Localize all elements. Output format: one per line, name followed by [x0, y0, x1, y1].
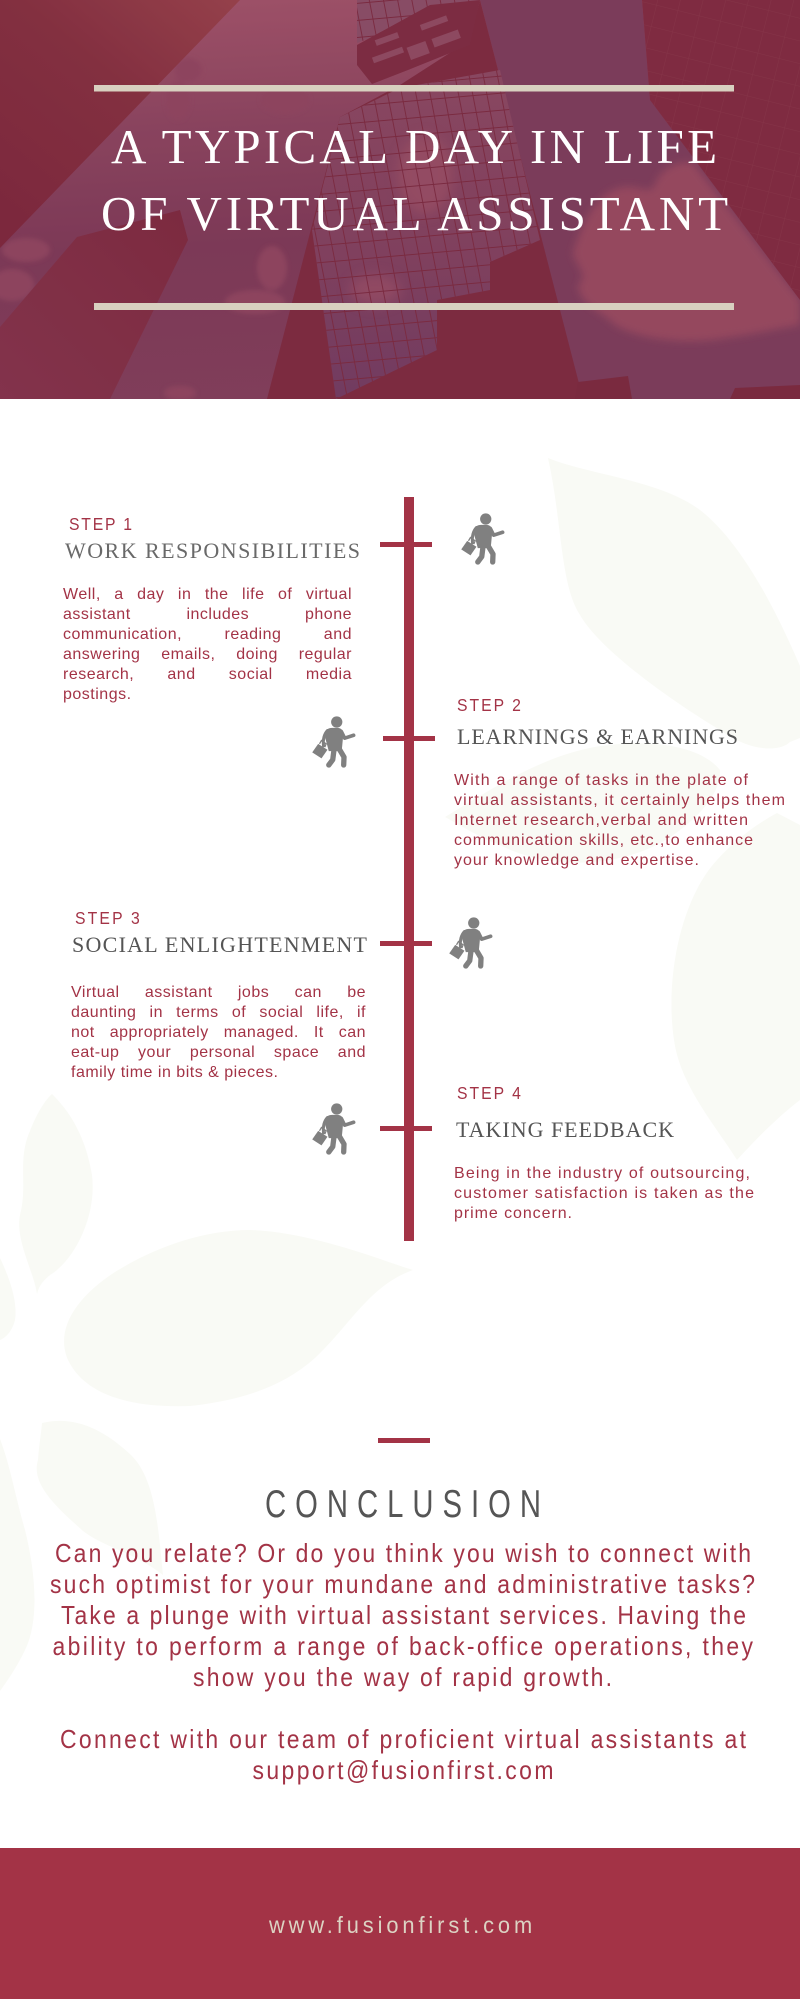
title: OF VIRTUAL ASSISTANT	[101, 186, 728, 241]
title	[101, 119, 728, 241]
conclusion text	[50, 1540, 755, 1785]
panel: step 3: not appropriately managed. It can	[71, 1024, 366, 1041]
panel: step 1: research, and social media	[63, 666, 352, 683]
panel: step 3: eat-up your personal space and	[71, 1044, 366, 1061]
panel: step 4: Being in the industry of outsourcing,	[454, 1165, 750, 1182]
conclusion text: support@fusionfirst.com	[252, 1757, 553, 1785]
panel: step 1: STEP 1	[69, 514, 132, 534]
panel: step 4: customer satisfaction is taken as the	[454, 1185, 754, 1202]
panel: step 1	[63, 514, 360, 710]
panel: step 2	[454, 695, 785, 869]
panel: step 3: family time in bits & pieces.	[71, 1064, 278, 1081]
panel: step 1: Well, a day in the life of virtual	[63, 586, 352, 602]
conclusion heading: CONCLUSION	[265, 1483, 541, 1526]
footer band: www.fusionfirst.com	[268, 1912, 532, 1938]
conclusion text: ability to perform a range of back-office operations, they	[52, 1633, 754, 1661]
panel: step 1: postings.	[63, 686, 132, 703]
panel: step 4	[454, 1083, 754, 1222]
panel: step 3: Virtual assistant jobs can be	[71, 984, 366, 1000]
panel: step 4: prime concern.	[454, 1205, 572, 1222]
panel: step 2: communication skills, etc.,to enhance	[454, 832, 753, 849]
icon: walking businessman 1	[461, 513, 503, 562]
panel: step 2: STEP 2	[457, 695, 521, 715]
panel: step 2: Internet research,verbal and written	[454, 812, 748, 829]
panel: step 1: answering emails, doing regular	[63, 646, 352, 663]
panel: step 3	[71, 908, 368, 1088]
panel: step 1: assistant includes phone	[63, 606, 352, 623]
panel: step 2: With a range of tasks in the plate of	[454, 772, 749, 789]
footer band	[0, 1848, 800, 1999]
panel: step 3: SOCIAL ENLIGHTENMENT	[72, 932, 368, 957]
timeline	[380, 497, 435, 1241]
conclusion text: Take a plunge with virtual assistant services. Having the	[61, 1602, 746, 1630]
panel: step 1: communication, reading and	[63, 626, 352, 643]
panel: step 3: STEP 3	[75, 908, 140, 928]
icon: walking businessman 3	[449, 917, 491, 966]
panel: step 3: daunting in terms of social life, if	[71, 1004, 366, 1021]
icon: walking businessman 4	[312, 1103, 354, 1152]
icon: walking businessman 2	[312, 716, 354, 765]
conclusion text: show you the way of rapid growth.	[193, 1664, 612, 1692]
background leaves	[0, 458, 800, 1691]
panel: step 1: WORK RESPONSIBILITIES	[65, 538, 360, 563]
conclusion text: such optimist for your mundane and administrative tasks?	[50, 1571, 755, 1599]
title: A TYPICAL DAY IN LIFE	[111, 119, 717, 174]
hero photo: skyscrapers with red tint	[0, 0, 800, 400]
title rule top	[94, 85, 734, 92]
panel: step 4: TAKING FEEDBACK	[456, 1117, 674, 1142]
panel: step 4: STEP 4	[457, 1083, 521, 1103]
conclusion text: Can you relate? Or do you think you wish to connect with	[55, 1540, 751, 1568]
title rule bottom	[94, 303, 734, 310]
panel: step 2: your knowledge and expertise.	[454, 852, 699, 869]
conclusion dash	[378, 1438, 430, 1443]
conclusion text: Connect with our team of proficient virtual assistants at	[60, 1726, 746, 1754]
panel: step 2: LEARNINGS & EARNINGS	[457, 724, 738, 749]
panel: step 2: virtual assistants, it certainly helps them	[454, 792, 785, 809]
